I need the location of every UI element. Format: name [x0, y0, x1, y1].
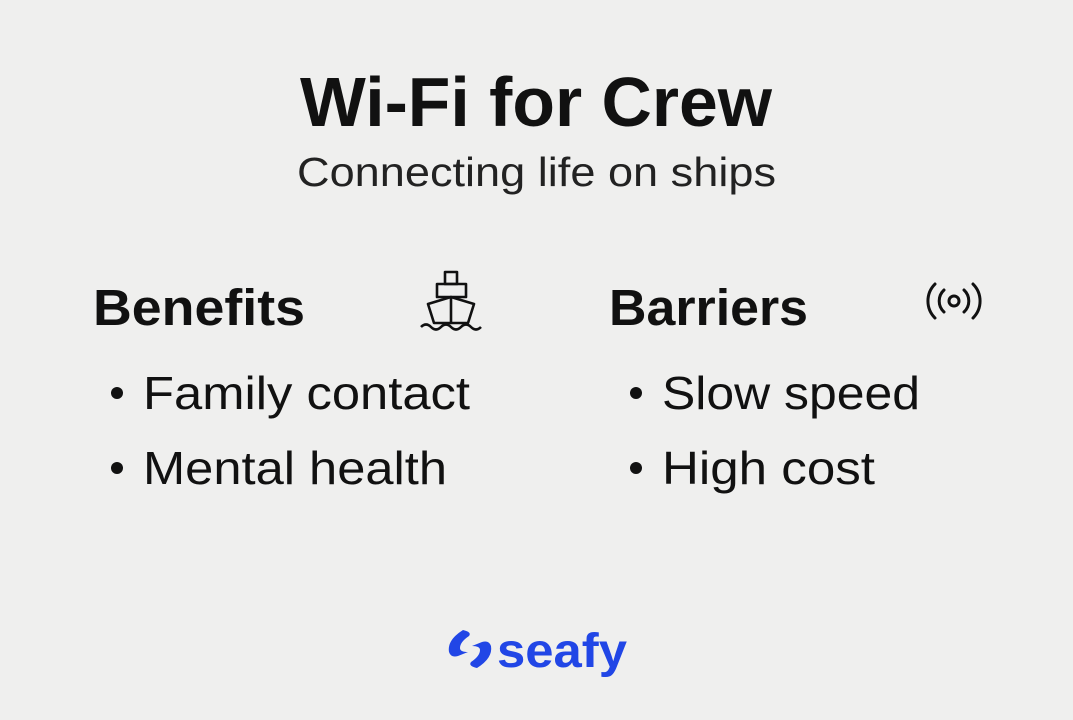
logo: seafy: seafy	[497, 625, 627, 678]
panel: barriers	[609, 279, 980, 494]
title: Wi-Fi for Crew	[300, 63, 773, 141]
icon: wifi signal	[928, 284, 980, 318]
list: barriers: High cost	[662, 442, 875, 494]
panel: benefits	[93, 272, 481, 494]
subtitle: Connecting life on ships	[297, 149, 776, 195]
heading: benefits: Benefits	[93, 279, 305, 336]
logo: seafy	[449, 625, 627, 678]
list: benefits: Mental health	[143, 442, 447, 494]
list: benefits	[111, 367, 470, 494]
list: barriers: Slow speed	[662, 367, 920, 419]
icon: ship	[421, 272, 481, 330]
list: barriers	[630, 367, 920, 494]
list: benefits: Family contact	[143, 367, 470, 419]
heading: barriers: Barriers	[609, 279, 808, 336]
